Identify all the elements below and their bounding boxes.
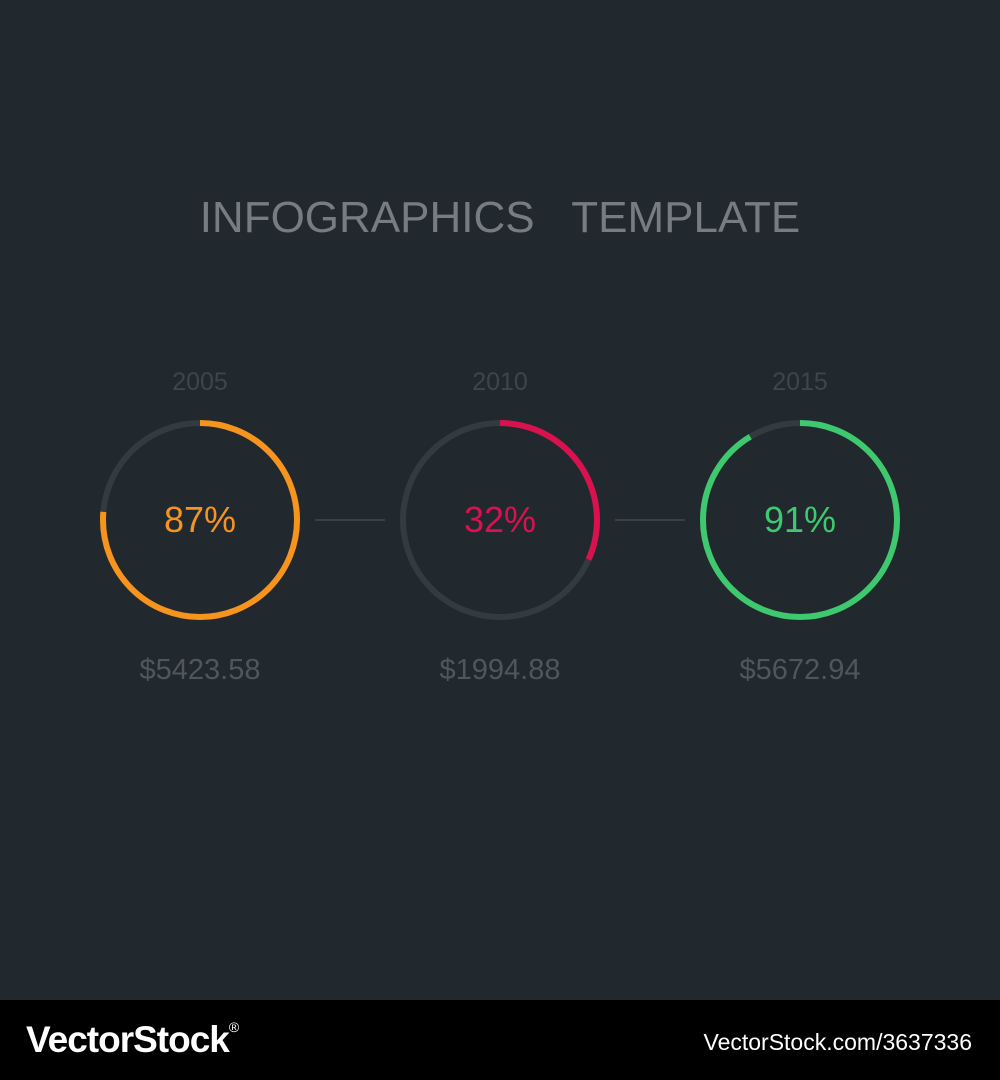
ring: 2005 87% [103,423,297,617]
money labels [140,654,860,686]
title: INFOGRAPHICS TEMPLATE [200,193,800,242]
ring: 2015 91%: 91% [764,499,836,540]
text: 2005 [172,368,228,396]
year labels [172,368,828,396]
connector: 2005-2010 [315,519,385,521]
text: 2010 [472,368,528,396]
text: 2015 [772,368,828,396]
ring: 2015 91% [703,423,897,617]
text: $1994.88 [440,654,560,686]
footer bar: VectorStock.com/3637336 [704,1029,972,1055]
connector: 2010-2015 [615,519,685,521]
text: $5423.58 [140,654,260,686]
ring: 2010 32%: 32% [464,499,536,540]
ring: 2005 87%: 87% [164,499,236,540]
text: $5672.94 [740,654,860,686]
footer bar: VectorStock® [26,1019,238,1060]
ring: 2010 32% [403,423,597,617]
footer bar [0,1000,1000,1080]
